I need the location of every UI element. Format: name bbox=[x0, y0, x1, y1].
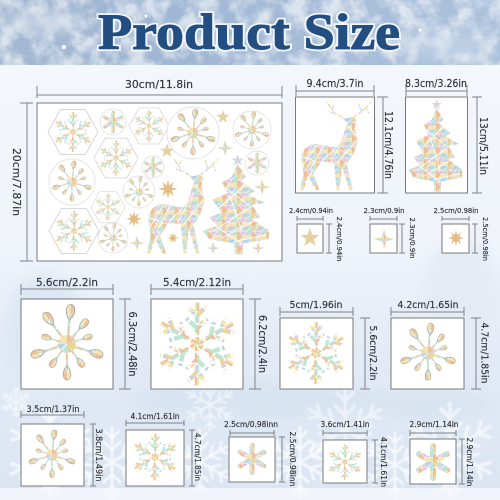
panel: flake 5.4cm bbox=[151, 277, 268, 389]
sheet stickers bbox=[48, 107, 271, 254]
panel: flake 5cm: 5.6cm/2.2in bbox=[367, 326, 378, 380]
panel: burst 5.6cm: 6.3cm/2.48in bbox=[126, 312, 138, 376]
height dimension: 20cm/7.87in bbox=[10, 148, 22, 216]
panel: four point star: 2.3cm/0.9in bbox=[408, 218, 416, 258]
panel: tree: 13cm/5.11in bbox=[477, 117, 489, 175]
panel: burst 3.5cm: 3.8cm/1.49in bbox=[93, 428, 103, 482]
panel: burst 3.5cm bbox=[21, 405, 103, 486]
panel: tree: 8.3cm/3.26in bbox=[405, 78, 467, 90]
panel: blob flake 2.5cm: 2.5cm/0.98inn bbox=[288, 432, 297, 487]
panel: flake 5.4cm: 5.4cm/2.12in bbox=[163, 277, 231, 289]
title: Product Size bbox=[98, 5, 400, 61]
panel: flake 5cm: 5cm/1.96in bbox=[290, 300, 342, 311]
panel: flake 4.1cm: 4.1cm/1.61in bbox=[130, 412, 180, 421]
panel: blob flake 2.5cm bbox=[224, 420, 297, 487]
panel: eight point star: 2.5cm/0.98in bbox=[434, 207, 478, 215]
panel: burst 4.2cm: 4.7cm/1.85in bbox=[478, 322, 490, 384]
panel: five point star: 2.4cm/0.94in bbox=[335, 216, 343, 262]
panel: deer: 12.1cm/4.76in bbox=[382, 111, 394, 179]
panel: four point star: 2.3cm/0.9in bbox=[364, 207, 404, 215]
panel: flake 5.4cm: 6.2cm/2.4in bbox=[256, 315, 268, 373]
panel: blob flake 2.9cm: 2.9cm/1.14in bbox=[465, 438, 474, 487]
panel: full sticker sheet bbox=[10, 79, 282, 261]
panel: blob flake 2.5cm: 2.5cm/0.98inn bbox=[224, 420, 278, 429]
panel: blob flake 2.9cm: 2.9cm/1.14in bbox=[410, 420, 459, 429]
panel: burst 5.6cm: 5.6cm/2.2in bbox=[36, 277, 98, 289]
panel: flake 5cm bbox=[280, 300, 378, 389]
width dimension: 30cm/11.8in bbox=[125, 79, 193, 91]
panel: flake 4.1cm: 4.7cm/1.85in bbox=[193, 433, 202, 481]
height dimension bbox=[10, 103, 33, 261]
panel: flake 4.1cm bbox=[126, 412, 202, 486]
header banner bbox=[0, 0, 500, 65]
panel: deer bbox=[296, 78, 394, 193]
panel: burst 4.2cm: 4.2cm/1.65in bbox=[398, 300, 458, 311]
panel: eight point star bbox=[434, 207, 489, 261]
panel: flake 3.6cm bbox=[320, 420, 388, 487]
panel: burst 4.2cm bbox=[391, 300, 490, 389]
panel: four point star bbox=[364, 207, 416, 258]
title: Product Size bbox=[98, 5, 400, 61]
panel: burst 5.6cm bbox=[21, 277, 138, 389]
panel: deer: 9.4cm/3.7in bbox=[306, 78, 364, 90]
panel: burst 3.5cm: 3.5cm/1.37in bbox=[26, 405, 80, 415]
width dimension bbox=[37, 79, 282, 98]
panel: eight point star: 2.5cm/0.98in bbox=[481, 217, 489, 261]
panel: flake 3.6cm: 3.6cm/1.41in bbox=[320, 420, 370, 429]
panel: flake 3.6cm: 4.1cm/1.61in bbox=[379, 437, 388, 487]
panel: tree bbox=[405, 78, 489, 193]
sheet frame bbox=[37, 103, 282, 261]
panel: five point star: 2.4cm/0.94in bbox=[289, 207, 333, 215]
panel: blob flake 2.9cm bbox=[410, 420, 474, 487]
panel: five point star bbox=[289, 207, 343, 262]
